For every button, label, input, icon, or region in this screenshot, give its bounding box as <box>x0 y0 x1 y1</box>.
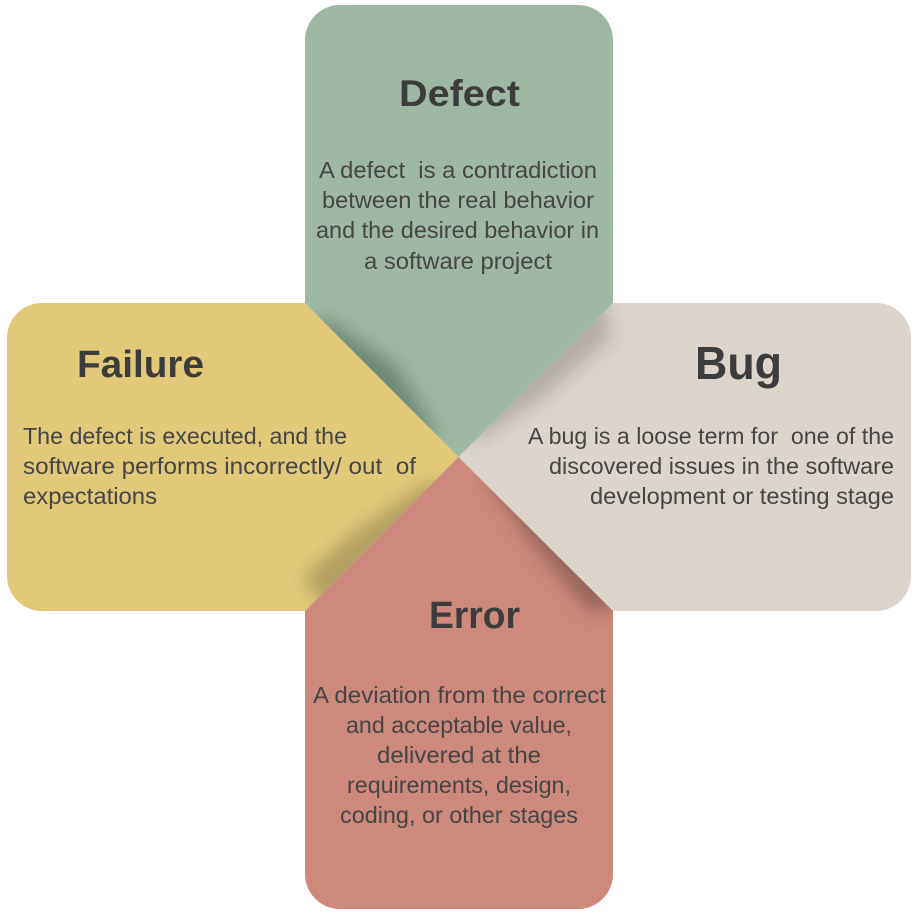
panel: failure <box>7 303 458 612</box>
panel: error <box>305 457 625 909</box>
text: error description: delivered at the <box>377 742 541 768</box>
text: bug description <box>528 423 894 509</box>
text: failure description: software performs incorrectly/ out of <box>23 453 417 479</box>
text: failure description: The defect is executed, and the <box>23 423 347 449</box>
text: defect description: and the desired behavior in <box>316 217 599 243</box>
heading: Failure: Failure <box>77 344 204 386</box>
panel: bug <box>458 295 911 611</box>
text: failure description <box>23 423 417 509</box>
text: failure description: expectations <box>23 483 157 509</box>
text: defect description <box>316 157 599 274</box>
panel: defect <box>300 5 613 457</box>
heading: Error: Error <box>429 595 520 637</box>
text: error description: requirements, design, <box>347 772 571 798</box>
text: error description: A deviation from the correct <box>313 682 607 708</box>
heading: Defect: Defect <box>399 73 520 114</box>
text: bug description: discovered issues in the software <box>549 453 894 479</box>
heading: Bug: Bug <box>695 337 782 389</box>
text: defect description: between the real behavior <box>322 187 594 213</box>
text: defect description: a software project <box>364 248 553 274</box>
text: defect description: A defect is a contradiction <box>319 157 597 183</box>
text: error description: coding, or other stages <box>340 802 578 828</box>
text: error description <box>313 682 607 828</box>
text: error description: and acceptable value, <box>346 712 572 738</box>
text: bug description: A bug is a loose term for one of the <box>528 423 894 449</box>
text: bug description: development or testing stage <box>590 483 894 509</box>
